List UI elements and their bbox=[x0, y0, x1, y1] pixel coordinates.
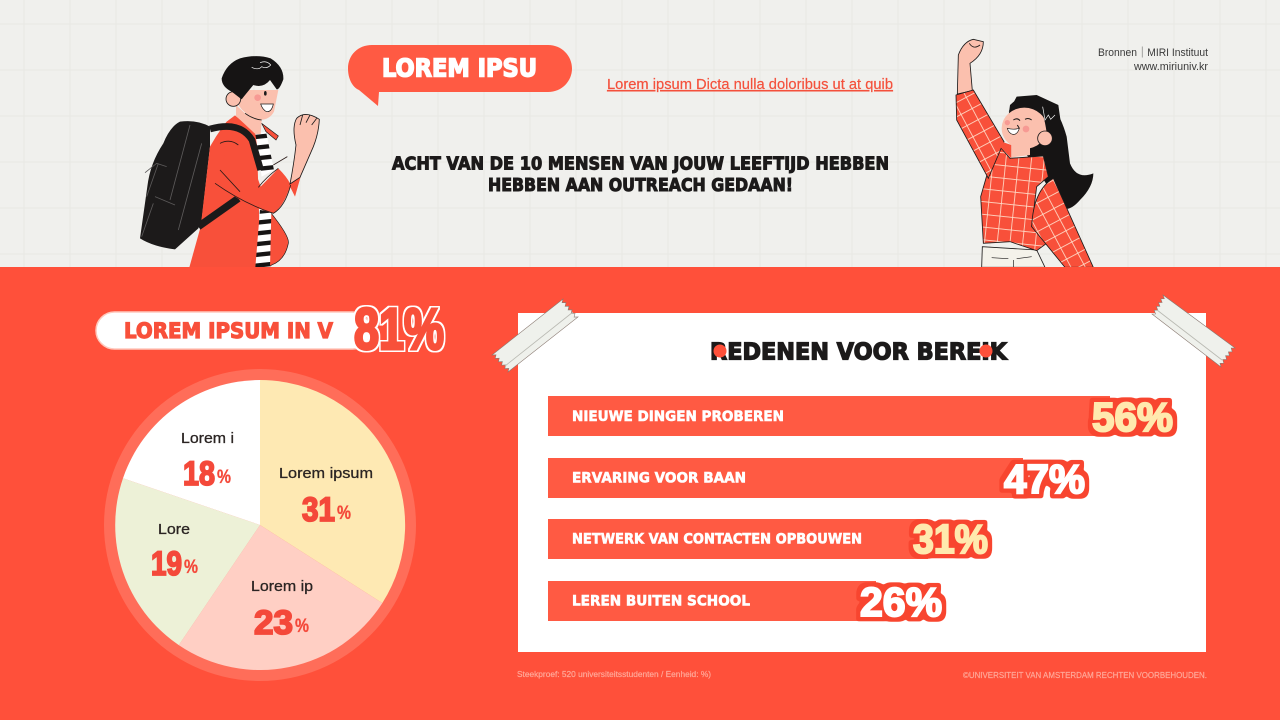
slice label: Lorem i 18%: 18 bbox=[183, 455, 215, 493]
main headline: HEBBEN AAN OUTREACH GEDAAN! bbox=[488, 176, 793, 196]
bar: leren buiten school 26%: LEREN BUITEN SCHOOL bbox=[572, 594, 750, 610]
main headline: ACHT VAN DE 10 MENSEN VAN JOUW LEEFTIJD HEBBEN bbox=[392, 154, 889, 174]
bar: ervaring voor baan 47%: 47% bbox=[1004, 456, 1085, 502]
footnote: sample: Steekproef: 520 universiteitsstudenten / Eenheid: %) bbox=[517, 669, 711, 679]
top background with grid bbox=[0, 0, 1280, 267]
illustration: student with backpack bbox=[140, 56, 319, 267]
bar: netwerk van contacten opbouwen 31%: 31% bbox=[913, 516, 988, 562]
bar: ervaring voor baan 47%: ERVARING VOOR BAAN bbox=[572, 470, 746, 486]
subtitle link: Lorem ipsum Dicta nulla doloribus ut at quib bbox=[607, 77, 893, 93]
panel: reasons for outreach bbox=[518, 313, 1206, 652]
slice label: Lorem ipsum 31% bbox=[279, 465, 373, 529]
bar: netwerk van contacten opbouwen 31%: NETWERK VAN CONTACTEN OPBOUWEN bbox=[572, 532, 862, 548]
slice label: Lorem i 18%: Lorem i bbox=[181, 430, 234, 447]
bar: leren buiten school 26%: 26% bbox=[860, 579, 942, 625]
slice label: Lore 19%: Lore bbox=[158, 521, 190, 538]
slice label: Lorem i 18% bbox=[181, 430, 234, 493]
source credit bbox=[1098, 46, 1208, 73]
footnote: copyright: ©UNIVERSITEIT VAN AMSTERDAM RECHTEN VOORBEHOUDEN. bbox=[963, 670, 1207, 680]
tape: left corner bbox=[492, 299, 578, 372]
pill heading with 81% bbox=[96, 297, 444, 362]
illustration: girl raising arm bbox=[956, 39, 1093, 267]
slice label: Lorem ip 23%: % bbox=[295, 616, 309, 637]
slice label: Lorem ip 23%: 23 bbox=[254, 604, 293, 642]
bar: nieuwe dingen proberen 56%: NIEUWE DINGEN PROBEREN bbox=[572, 409, 784, 425]
bar: nieuwe dingen proberen 56%: 56% bbox=[1092, 394, 1173, 440]
panel heading: REDENEN VOOR BEREIK bbox=[710, 340, 1008, 366]
red lower section bbox=[0, 267, 1280, 720]
title speech bubble bbox=[348, 45, 572, 106]
slice label: Lorem ip 23% bbox=[251, 578, 313, 642]
title speech bubble: LOREM IPSU bbox=[382, 54, 537, 82]
slice label: Lorem ipsum 31%: Lorem ipsum bbox=[279, 465, 373, 482]
bar: nieuwe dingen proberen 56% bbox=[548, 394, 1173, 440]
pill heading with 81%: 81% bbox=[354, 297, 444, 362]
slice label: Lore 19%: 19 bbox=[151, 545, 182, 583]
bar: netwerk van contacten opbouwen 31% bbox=[548, 516, 988, 562]
bar: leren buiten school 26% bbox=[548, 579, 942, 625]
bar: ervaring voor baan 47% bbox=[548, 456, 1085, 502]
tape: right corner bbox=[1152, 295, 1235, 367]
main headline bbox=[392, 154, 889, 196]
slice label: Lorem ipsum 31%: % bbox=[337, 503, 351, 524]
slice label: Lorem ipsum 31%: 31 bbox=[302, 491, 335, 529]
pill heading with 81%: LOREM IPSUM IN V bbox=[124, 319, 333, 344]
slice label: Lore 19% bbox=[151, 521, 198, 583]
source credit: www.miriuniv.kr bbox=[1133, 61, 1208, 73]
slice label: Lore 19%: % bbox=[184, 557, 198, 578]
slice label: Lorem ip 23%: Lorem ip bbox=[251, 578, 313, 595]
slice label: Lorem i 18%: % bbox=[217, 467, 231, 488]
pie chart bbox=[104, 369, 416, 681]
source credit: Bronnen｜MIRI Instituut bbox=[1098, 46, 1208, 59]
